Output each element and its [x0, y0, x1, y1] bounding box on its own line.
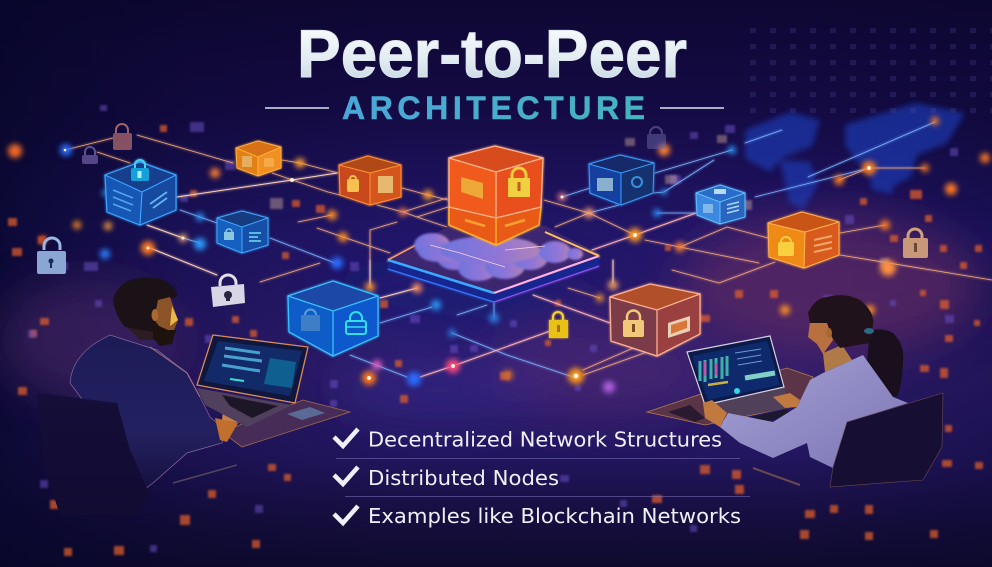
person: woman at laptop — [647, 295, 943, 487]
node cube: small blue — [217, 211, 268, 253]
desk lower edge right — [753, 468, 800, 485]
hand left — [703, 400, 727, 427]
desk right — [647, 368, 813, 425]
padlock: light blue left — [37, 238, 66, 274]
ponytail — [867, 329, 903, 397]
item: examples: Examples like Blockchain Networks — [368, 504, 741, 528]
hair — [808, 295, 873, 348]
network connection lines — [65, 122, 992, 377]
desk left — [222, 400, 350, 447]
node cube: orange second — [339, 156, 401, 205]
forearm — [215, 418, 238, 442]
tablet — [287, 407, 325, 420]
face right — [808, 322, 833, 354]
node cube: blue lower left — [288, 281, 378, 356]
chair right — [830, 393, 943, 487]
feature list — [334, 428, 750, 528]
person: man at laptop — [37, 277, 350, 515]
clouds — [414, 233, 583, 281]
torso left — [70, 335, 225, 500]
face — [155, 297, 178, 335]
laptop base — [197, 388, 292, 427]
padlock: tan right — [903, 229, 928, 258]
torso right — [720, 355, 908, 470]
padlock: faded pink — [113, 124, 132, 150]
node cube: large blue left — [105, 160, 176, 225]
data particles — [8, 105, 983, 556]
laptop screen right — [687, 336, 784, 405]
chair left — [37, 393, 150, 515]
desk lower edge — [173, 465, 237, 483]
hand — [222, 405, 253, 423]
padlock: faded purple — [82, 147, 98, 164]
subtitle: ARCHITECTURE — [342, 90, 645, 126]
node cube: small orange top — [236, 141, 281, 176]
hair tie — [864, 328, 874, 334]
item: distributed: Distributed Nodes — [368, 466, 559, 490]
laptop screen — [197, 335, 308, 403]
laptop base right — [705, 387, 790, 417]
sleeve highlight — [150, 347, 200, 397]
ear right — [826, 328, 832, 338]
item: decentralized: Decentralized Network Structures — [368, 428, 722, 452]
padlock: white — [211, 275, 245, 307]
padlock: yellow — [549, 312, 568, 338]
node cube: coral lower right — [610, 284, 700, 356]
node cube: large central server — [449, 146, 543, 245]
face highlight — [170, 306, 178, 326]
head — [113, 277, 178, 332]
node cube: orange right — [768, 212, 839, 268]
neck right — [823, 345, 852, 372]
node cube: light blue right — [696, 185, 745, 224]
list dividers — [336, 458, 750, 496]
title: Peer-to-Peer — [297, 16, 687, 92]
cloud platform — [388, 226, 599, 302]
dot grid — [750, 28, 992, 120]
padlock: faded blue top — [647, 127, 666, 149]
notepad — [668, 405, 705, 422]
beard — [153, 318, 176, 346]
hand right — [773, 393, 800, 408]
world map — [745, 103, 965, 210]
node cube: blue right — [589, 155, 654, 205]
neck — [127, 320, 155, 340]
glowing network nodes — [8, 117, 990, 393]
keyboard right — [752, 409, 790, 424]
keyboard — [222, 395, 278, 418]
ear — [152, 309, 158, 321]
